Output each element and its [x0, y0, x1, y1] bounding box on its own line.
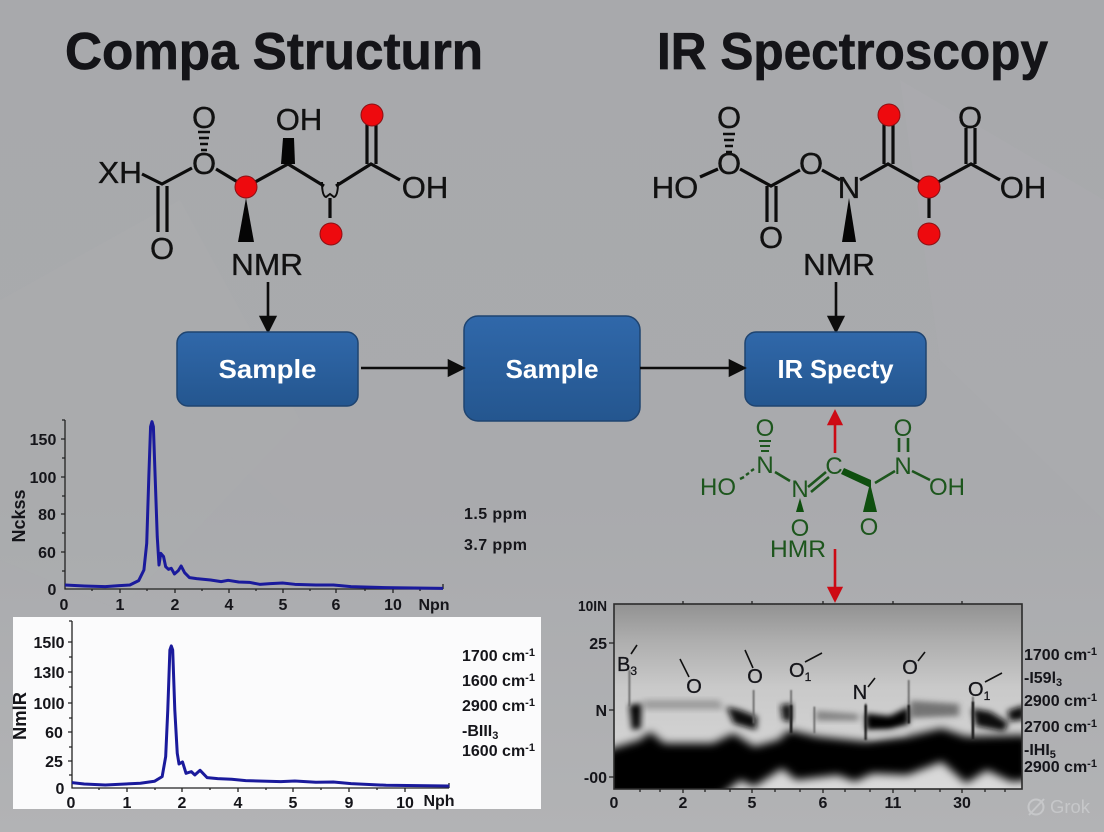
molecule: right structure: O [717, 146, 741, 181]
molecule: right structure: O [958, 100, 982, 135]
molecule: right structure: O [759, 220, 783, 255]
arrow: NMR to IR box [829, 282, 843, 331]
panel: white NMR chart: 25 [45, 754, 63, 771]
chart: IR spectrum photo: 0 [610, 795, 619, 812]
molecule: green structure: N [756, 452, 774, 479]
legend: white chart wavenumbers: 1700 cm [462, 648, 525, 665]
chart: IR spectrum photo: 5 [748, 795, 757, 812]
panel: white NMR chart: 4 [234, 795, 243, 812]
panel: white NMR chart: 5 [289, 795, 298, 812]
legend: IR wavenumbers: -1 [1087, 758, 1097, 770]
legend: white chart wavenumbers: 3 [492, 730, 498, 742]
legend: white chart wavenumbers: -1 [525, 742, 535, 754]
molecule: green structure: HO [700, 474, 736, 501]
panel: white NMR chart: 60 [45, 725, 63, 742]
title: compound structure: Compa Structurn [65, 23, 483, 81]
chart: NMR spectrum top [9, 420, 450, 614]
legend: white chart wavenumbers: -1 [525, 647, 535, 659]
panel: white NMR chart: NmlR [10, 692, 30, 740]
panel: white NMR chart: 1 [123, 795, 132, 812]
chart: IR spectrum photo: N [595, 703, 607, 720]
legend: IR wavenumbers: 2700 cm [1024, 719, 1087, 736]
peak labels: O [902, 657, 918, 679]
legend: white chart wavenumbers: 2900 cm [462, 698, 525, 715]
molecule: left structure: NMR [231, 247, 303, 282]
box: sample 1: Sample [218, 354, 316, 384]
arrow: red down [829, 549, 841, 600]
panel: white NMR chart: 10l0 [34, 696, 65, 713]
chart: NMR spectrum top: 2 [171, 597, 180, 614]
chart: NMR spectrum top: 60 [38, 545, 56, 562]
box: IR spectroscopy: IR Specty [778, 354, 894, 384]
peak labels: O [747, 666, 763, 688]
chart: NMR spectrum top: 80 [38, 507, 56, 524]
legend: white chart wavenumbers: 1600 cm [462, 673, 525, 690]
chart: NMR spectrum top: 6 [332, 597, 341, 614]
panel: white NMR chart: 0 [67, 795, 76, 812]
arrow: sample to sample [361, 361, 463, 375]
legend: white chart wavenumbers [462, 647, 535, 760]
chart: IR spectrum photo: 25 [589, 636, 607, 653]
molecule: green structure: O [894, 415, 912, 442]
legend: IR wavenumbers: 5 [1050, 749, 1056, 761]
molecule: left structure: O [150, 231, 174, 266]
chart: NMR spectrum top: 5 [279, 597, 288, 614]
panel: white NMR chart: 9 [345, 795, 354, 812]
chart: NMR spectrum top: 0 [48, 582, 57, 599]
peak labels: 1 [805, 670, 812, 684]
panel: white NMR chart: 0 [56, 781, 65, 798]
molecule: left structure: OH [402, 170, 448, 205]
chart: IR spectrum photo: 30 [953, 795, 971, 812]
legend: IR wavenumbers: 3 [1056, 677, 1062, 689]
legend: IR wavenumbers: 1700 cm [1024, 647, 1087, 664]
legend: IR wavenumbers: -I59l [1024, 670, 1056, 687]
legend: IR wavenumbers: 2900 cm [1024, 693, 1087, 710]
molecule: right structure [652, 100, 1046, 282]
legend: IR wavenumbers: -1 [1087, 692, 1097, 704]
molecule: green structure: OH [929, 474, 965, 501]
legend: white chart wavenumbers: -BIII [462, 723, 492, 740]
molecule: left structure: OH [276, 102, 322, 137]
chart: NMR spectrum top: 0 [60, 597, 69, 614]
legend: ppm values: 1.5 ppm [464, 506, 527, 523]
chart: NMR spectrum top: Nckss [9, 490, 29, 542]
chart: IR spectrum photo: 10IN [578, 598, 607, 615]
box: IR spectroscopy [745, 332, 926, 406]
molecule: green structure: O [756, 415, 774, 442]
peak labels: O [686, 676, 702, 698]
molecule: left structure: XH [98, 155, 142, 190]
panel: white NMR chart: 15l0 [34, 635, 65, 652]
arrow: sample to IR [640, 361, 744, 375]
legend: IR wavenumbers: -1 [1087, 646, 1097, 658]
chart: NMR spectrum top: 10 [384, 597, 402, 614]
molecule: green structure: O [791, 515, 809, 542]
arrow: NMR to sample left [261, 282, 275, 331]
chart: NMR spectrum top: Npn [418, 597, 450, 614]
chart: IR spectrum photo: 11 [885, 795, 902, 812]
molecule: left structure [98, 100, 448, 282]
molecule: green structure: HMR [770, 536, 826, 563]
legend: IR wavenumbers: 2900 cm [1024, 759, 1087, 776]
legend: IR wavenumbers [1024, 646, 1097, 776]
chart: NMR spectrum top: 100 [30, 470, 56, 487]
molecule: right structure: O [799, 146, 823, 181]
peak labels: B [617, 654, 630, 676]
legend: white chart wavenumbers: -1 [525, 672, 535, 684]
chart: IR spectrum photo [578, 598, 1028, 812]
legend: IR wavenumbers: -IHI [1024, 742, 1050, 759]
peak labels: O [789, 660, 805, 682]
molecule: right structure: O [717, 100, 741, 135]
molecule: green structure: N [894, 453, 912, 480]
molecule: right structure: N [838, 170, 860, 205]
chart: IR spectrum photo: 6 [819, 795, 828, 812]
peak labels [617, 645, 1002, 704]
molecule: green structure: C [825, 453, 843, 480]
box: sample 2 [464, 316, 640, 421]
chart: NMR spectrum top: 150 [30, 432, 56, 449]
panel: white NMR chart: 10 [396, 795, 414, 812]
molecule: green structure: O [860, 514, 878, 541]
molecule: right structure: HO [652, 170, 698, 205]
panel: white NMR chart: 13l0 [34, 665, 65, 682]
peak labels: O [968, 679, 984, 701]
molecule: right structure: OH [1000, 170, 1046, 205]
molecule: green structure [700, 415, 965, 563]
molecule: right structure: NMR [803, 247, 875, 282]
molecule: left structure: O [192, 100, 216, 135]
panel: white NMR chart: Nph [423, 793, 455, 810]
peak labels: 1 [984, 689, 991, 703]
legend: ppm values: 3.7 ppm [464, 537, 527, 554]
box: sample 2: Sample [506, 354, 598, 384]
panel: white NMR chart: 2 [178, 795, 187, 812]
arrow: red up [829, 412, 841, 453]
chart: NMR spectrum top: 4 [225, 597, 234, 614]
chart: IR spectrum photo: 2 [679, 795, 688, 812]
chart: NMR spectrum top: 1 [116, 597, 125, 614]
molecule: green structure: N [791, 476, 809, 503]
peak labels: 3 [630, 664, 637, 678]
peak labels: N [853, 682, 867, 704]
panel: white NMR chart [10, 617, 541, 812]
molecule: left structure: O [192, 146, 216, 181]
legend: white chart wavenumbers: 1600 cm [462, 743, 525, 760]
legend: IR wavenumbers: -1 [1087, 718, 1097, 730]
legend: white chart wavenumbers: -1 [525, 697, 535, 709]
watermark: Grok: Grok [1050, 797, 1091, 817]
legend: ppm values [464, 506, 527, 554]
title: IR spectroscopy: IR Spectroscopy [657, 23, 1048, 81]
chart: IR spectrum photo: -00 [584, 770, 607, 787]
box: sample 1 [177, 332, 358, 406]
watermark: Grok [1028, 797, 1091, 817]
